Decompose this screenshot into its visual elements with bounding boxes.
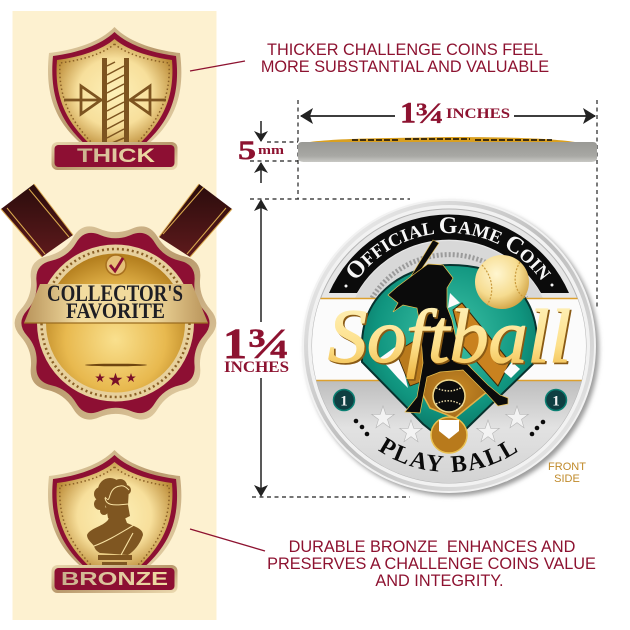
badge: number 1 right — [546, 390, 566, 410]
coin front — [302, 199, 602, 499]
dimension: height 1 3/4 inches — [223, 199, 290, 497]
infield: dirt and baselines — [380, 293, 520, 418]
dots on black band — [344, 284, 554, 288]
icon: check seal — [106, 255, 126, 275]
badge: bronze — [48, 450, 181, 593]
icon: three stars — [95, 373, 136, 386]
dimension: height 1 3/4 inches: 1 — [223, 321, 247, 368]
medal: collector's favorite — [1, 184, 232, 420]
badge: number 1 left — [334, 390, 354, 410]
black arc band — [329, 215, 569, 293]
dimension: height 1 3/4 inches: INCHES — [224, 359, 289, 376]
home plate — [431, 417, 467, 453]
teal diamond field — [362, 265, 537, 440]
text: bronze caption: PRESERVES A CHALLENGE COINS VALUE — [267, 555, 596, 573]
ribbon: right — [159, 184, 232, 257]
icon: thickness diagram — [64, 58, 166, 143]
dimension: width 1 3/4 inches: INCHES — [446, 106, 510, 122]
banner: collector's favorite: COLLECTOR'S — [47, 281, 183, 306]
title: Softball: Softball — [330, 296, 572, 380]
badge: scalloped edge — [15, 226, 216, 420]
dimension: thickness 5 mm — [238, 121, 284, 183]
leader line: bronze — [190, 529, 265, 551]
coin face — [312, 214, 586, 483]
label plate: BRONZE — [52, 565, 178, 593]
banner: collector's favorite: FAVORITE — [66, 298, 165, 323]
badge: number 1 right: 1 — [552, 394, 560, 410]
divider shadow — [85, 364, 147, 366]
coin shadow — [305, 202, 599, 496]
dimension guides — [250, 100, 597, 497]
lower silver field — [317, 381, 581, 483]
softball: flying ball — [475, 255, 529, 309]
dimension: thickness 5 mm: 5 — [238, 136, 256, 165]
dimension: width 1 3/4 inches: 1 — [400, 96, 416, 130]
batter silhouette — [388, 240, 508, 413]
text: bronze caption: DURABLE BRONZE ENHANCES AND — [289, 538, 575, 556]
softball icon: black ball — [433, 380, 465, 412]
dimension: width 1 3/4 inches: ¾ — [415, 97, 444, 130]
ribbon: left — [1, 184, 73, 257]
inner silver arc — [355, 241, 543, 298]
banner: collector's favorite — [24, 281, 208, 323]
label plate: BRONZE: BRONZE — [61, 569, 168, 589]
text: play ball: PLAY BALL — [378, 436, 518, 472]
badge: number 1 left: 1 — [340, 394, 348, 410]
dimension: thickness 5 mm: mm — [258, 142, 284, 157]
badge: thick — [48, 27, 181, 170]
title: Softball: Softball — [328, 295, 571, 379]
panel: cream column — [12, 11, 216, 620]
text: thick caption: MORE SUBSTANTIAL AND VALUABLE — [261, 58, 549, 76]
coin side view — [298, 137, 597, 162]
text: official game coin: OFFICIAL GAME COIN — [347, 217, 552, 280]
white strip — [312, 299, 586, 380]
icon: bust — [87, 478, 143, 567]
leader line: thick — [190, 61, 245, 71]
text: thick caption: THICKER CHALLENGE COINS FEEL — [267, 41, 543, 59]
dimension: height 1 3/4 inches: ¾ — [247, 321, 290, 368]
icon: silver stars — [372, 406, 528, 442]
coin rim — [302, 199, 596, 493]
text: bronze caption: AND INTEGRITY. — [375, 572, 504, 590]
text: front side: SIDE — [554, 473, 580, 485]
label plate: THICK: THICK — [77, 146, 155, 167]
dots near play ball — [354, 419, 545, 436]
text: front side: FRONT — [548, 461, 586, 473]
label plate: THICK — [52, 142, 178, 170]
dimension: width 1 3/4 inches — [300, 96, 596, 130]
